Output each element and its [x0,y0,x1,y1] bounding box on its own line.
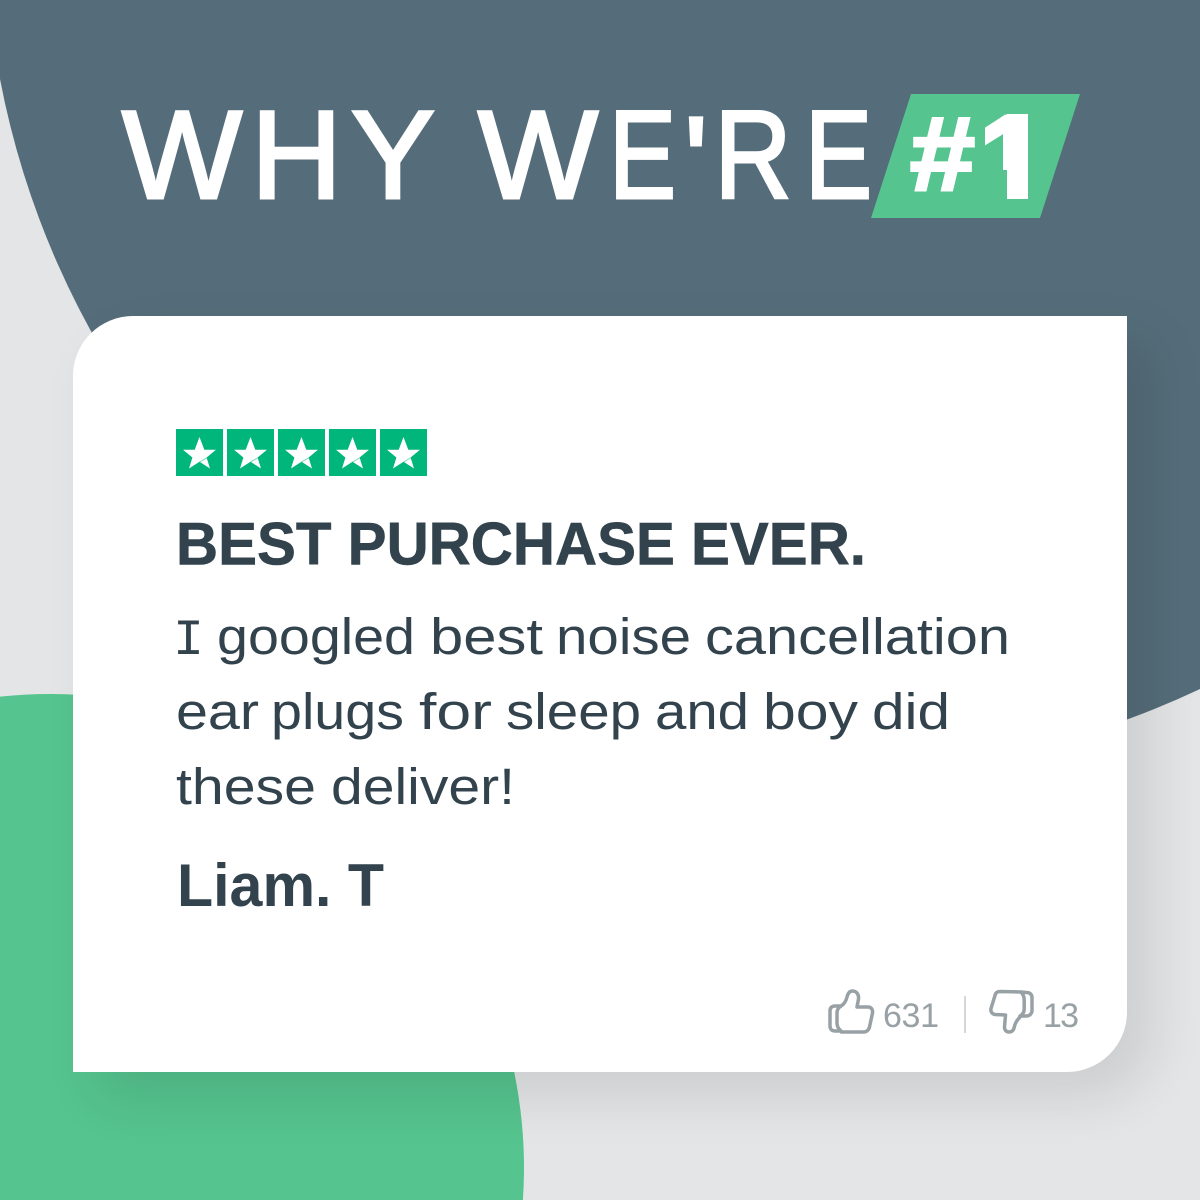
review body: noise [556,608,691,665]
review body: these [176,758,316,815]
vote count: up: 631 [883,997,939,1035]
vote count: down: 13 [1043,997,1079,1035]
review body: googled [217,608,415,665]
icon: five star rating [176,429,427,476]
review heading: BEST PURCHASE EVER. [176,510,866,578]
badge: #1: 1 [977,91,1044,225]
title text: H [251,86,342,225]
badge: #1 [871,91,1080,225]
background shape: green [0,694,524,1200]
review body: and [655,683,749,740]
review body: plugs [271,683,404,740]
review body: I [173,613,204,670]
review body: for [419,683,492,740]
review body [173,608,1010,815]
review body: did [872,683,950,740]
title text: E [609,86,676,225]
panel: review card [73,316,1127,1072]
review body: cancellation [705,608,1010,665]
review body: sleep [506,683,641,740]
title text [122,86,872,231]
title [120,94,1080,218]
reviewer name: Liam. T [177,852,384,919]
icon: thumbs down [991,992,1032,1032]
title text: ' [684,92,708,231]
card shadow [98,341,1152,1097]
review body: deliver! [331,758,515,815]
review body: best [430,608,543,665]
icon: thumbs up [830,991,873,1032]
title text: Y [351,86,435,225]
title text: R [714,86,792,225]
title text: W [478,86,598,225]
review body: ear [176,683,259,740]
background shape: dark slate [0,0,1200,771]
title text: W [122,86,242,225]
divider [964,996,966,1033]
badge: #1: # [910,96,975,213]
title text: E [805,86,872,225]
review body: boy [763,683,859,740]
